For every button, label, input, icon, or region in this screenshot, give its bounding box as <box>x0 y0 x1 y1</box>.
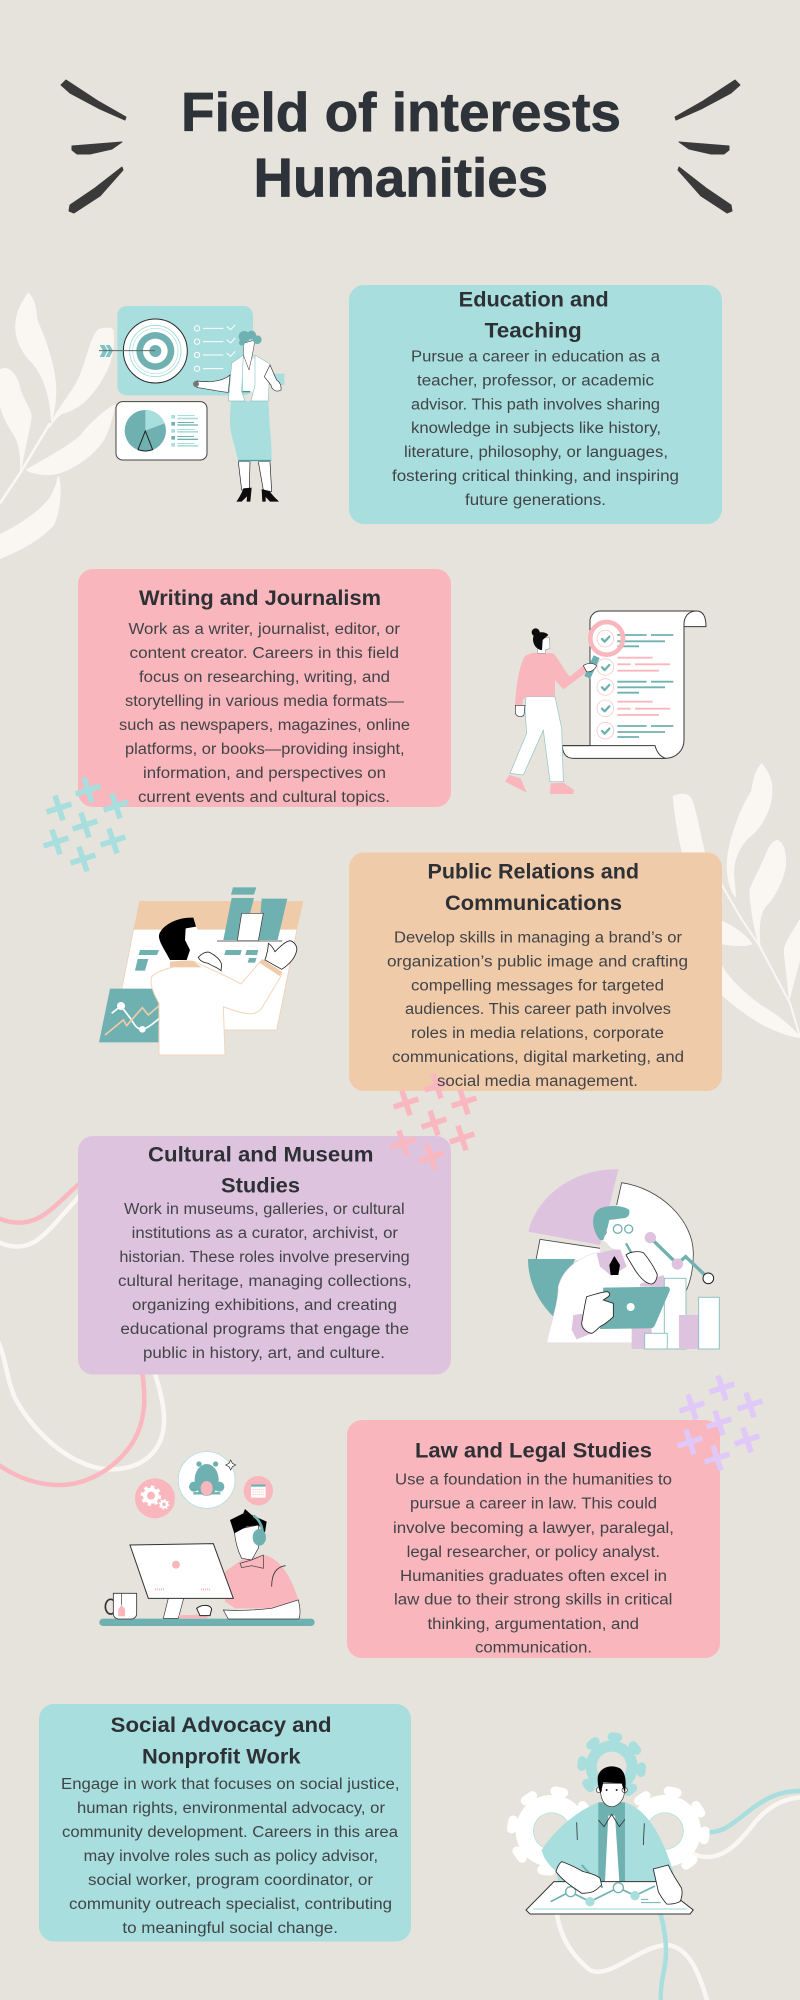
body text: communications, digital marketing, and <box>392 1049 684 1066</box>
body text: content creator. Careers in this field <box>130 645 399 662</box>
body text: current events and cultural topics. <box>138 789 390 806</box>
checklist <box>194 325 235 371</box>
body text <box>118 1201 412 1362</box>
computer <box>130 1544 233 1618</box>
body text: fostering critical thinking, and inspiring <box>392 468 679 485</box>
heading <box>459 287 609 342</box>
pie chart card <box>116 402 207 460</box>
body text <box>61 1776 400 1937</box>
man figure <box>542 1766 673 1882</box>
decoration: pink crosses <box>387 1070 480 1173</box>
heading: Public Relations and <box>428 860 639 884</box>
illustration: woman presenting target board <box>99 306 284 502</box>
body text: storytelling in various media formats— <box>125 693 405 710</box>
panel: public relations and communications <box>349 852 722 1091</box>
heading: Teaching <box>485 318 582 342</box>
bar chart <box>632 1278 719 1349</box>
body text: organization’s public image and crafting <box>387 953 688 970</box>
decoration: right title brush strokes <box>675 80 740 213</box>
magnifier <box>587 622 623 677</box>
illustration: man with gears drawing chart <box>512 1737 705 1914</box>
body text: Pursue a career in education as a <box>411 348 660 365</box>
decoration: left pink and white squiggles <box>0 1175 164 1485</box>
heading: Law and Legal Studies <box>415 1438 652 1462</box>
body text: thinking, argumentation, and <box>428 1616 639 1633</box>
teacher figure <box>193 331 284 502</box>
mug with tea <box>105 1593 137 1619</box>
illustration: man planning charts <box>99 887 303 1055</box>
illustration: man at computer with headphones <box>99 1452 315 1626</box>
illustration: man with tablet and charts <box>528 1169 719 1349</box>
panel: law and legal studies <box>347 1420 720 1658</box>
decoration: left title brush strokes <box>61 80 126 213</box>
body text <box>393 1472 674 1657</box>
body text: platforms, or books—providing insight, <box>125 741 405 758</box>
decoration: right leaf sprig <box>673 764 800 1037</box>
chart sheet <box>526 1882 693 1914</box>
body text: Use a foundation in the humanities to <box>395 1472 672 1489</box>
body text: involve becoming a lawyer, paralegal, <box>393 1520 674 1537</box>
heading <box>428 860 639 915</box>
body text: cultural heritage, managing collections, <box>118 1273 412 1290</box>
title: Humanities <box>254 146 548 208</box>
heading: Communications <box>445 891 622 915</box>
planning sheet <box>122 887 303 1030</box>
body text: knowledge in subjects like history, <box>411 420 661 437</box>
title: Field of interests <box>181 81 621 143</box>
body text: roles in media relations, corporate <box>411 1025 664 1042</box>
body text <box>392 348 679 509</box>
gears <box>512 1737 705 1871</box>
frog bubble <box>178 1452 236 1508</box>
body text: law due to their strong skills in critical <box>394 1592 672 1609</box>
body text: literature, philosophy, or languages, <box>404 444 668 461</box>
heading <box>111 1713 332 1769</box>
rising line chart <box>645 1232 714 1284</box>
title <box>181 81 621 208</box>
body text: Work in museums, galleries, or cultural <box>124 1201 405 1218</box>
body text: public in history, art, and culture. <box>143 1345 385 1362</box>
man figure <box>151 918 297 1055</box>
body text: such as newspapers, magazines, online <box>119 717 410 734</box>
hands and pen <box>556 1862 682 1904</box>
body text: institutions as a curator, archivist, or <box>132 1225 398 1242</box>
heading: Social Advocacy and <box>111 1713 332 1737</box>
body text: community outreach specialist, contributing <box>69 1896 392 1913</box>
heading <box>148 1143 374 1198</box>
calendar bubble <box>244 1476 273 1505</box>
gears bubble <box>135 1478 175 1518</box>
decoration: bottom right squiggles <box>556 1791 800 2000</box>
pie sectors <box>528 1169 693 1317</box>
heading: Studies <box>221 1174 300 1198</box>
panel: writing and journalism <box>78 569 451 807</box>
line chart card <box>99 989 165 1042</box>
analyst figure <box>547 1206 668 1343</box>
body text: historian. These roles involve preserving <box>119 1249 410 1266</box>
body text: information, and perspectives on <box>143 765 386 782</box>
body text: teacher, professor, or academic <box>417 372 654 389</box>
body text <box>387 930 688 1066</box>
decoration: teal crosses <box>40 774 132 875</box>
body text: human rights, environmental advocacy, or <box>77 1800 385 1817</box>
body text: Engage in work that focuses on social justice, <box>61 1776 400 1793</box>
body text: may involve roles such as policy advisor, <box>84 1848 378 1865</box>
body text: Humanities graduates often excel in <box>400 1568 667 1585</box>
scroll checklist <box>562 611 706 758</box>
heading: Nonprofit Work <box>142 1745 301 1769</box>
heading: Writing and Journalism <box>139 586 381 610</box>
target <box>99 319 187 383</box>
panel: social advocacy and nonprofit work <box>39 1704 411 1942</box>
body text: legal researcher, or policy analyst. <box>407 1544 660 1561</box>
panel: cultural and museum studies <box>78 1136 451 1374</box>
body text: educational programs that engage the <box>120 1321 409 1338</box>
body text: community development. Careers in this area <box>62 1824 398 1841</box>
heading: Cultural and Museum <box>148 1143 374 1167</box>
body text: communication. <box>475 1640 592 1657</box>
body text: audiences. This career path involves <box>405 1001 671 1018</box>
body text: advisor. This path involves sharing <box>411 396 660 413</box>
body text: future generations. <box>465 492 606 509</box>
body text: compelling messages for targeted <box>411 977 664 994</box>
body text: to meaningful social change. <box>122 1920 338 1937</box>
woman figure <box>505 628 597 794</box>
body text: Work as a writer, journalist, editor, or <box>128 621 400 638</box>
panel: education and teaching <box>349 285 722 524</box>
decoration: left leaf sprig <box>0 293 115 558</box>
person at computer <box>223 1509 300 1619</box>
body text <box>119 621 410 806</box>
body text: organizing exhibitions, and creating <box>132 1297 397 1314</box>
illustration: woman with scroll and magnifier <box>505 611 706 794</box>
tablet and hand <box>572 1287 670 1349</box>
desk <box>99 1619 315 1626</box>
body text: pursue a career in law. This could <box>410 1496 657 1513</box>
body text: social worker, program coordinator, or <box>88 1872 373 1889</box>
body text: Develop skills in managing a brand’s or <box>394 930 682 946</box>
target board <box>117 306 253 395</box>
last line of public relations body text: social media management. <box>437 1073 638 1090</box>
body text: focus on researching, writing, and <box>139 669 390 686</box>
heading: Education and <box>459 287 609 311</box>
decoration: purple crosses <box>674 1372 766 1474</box>
